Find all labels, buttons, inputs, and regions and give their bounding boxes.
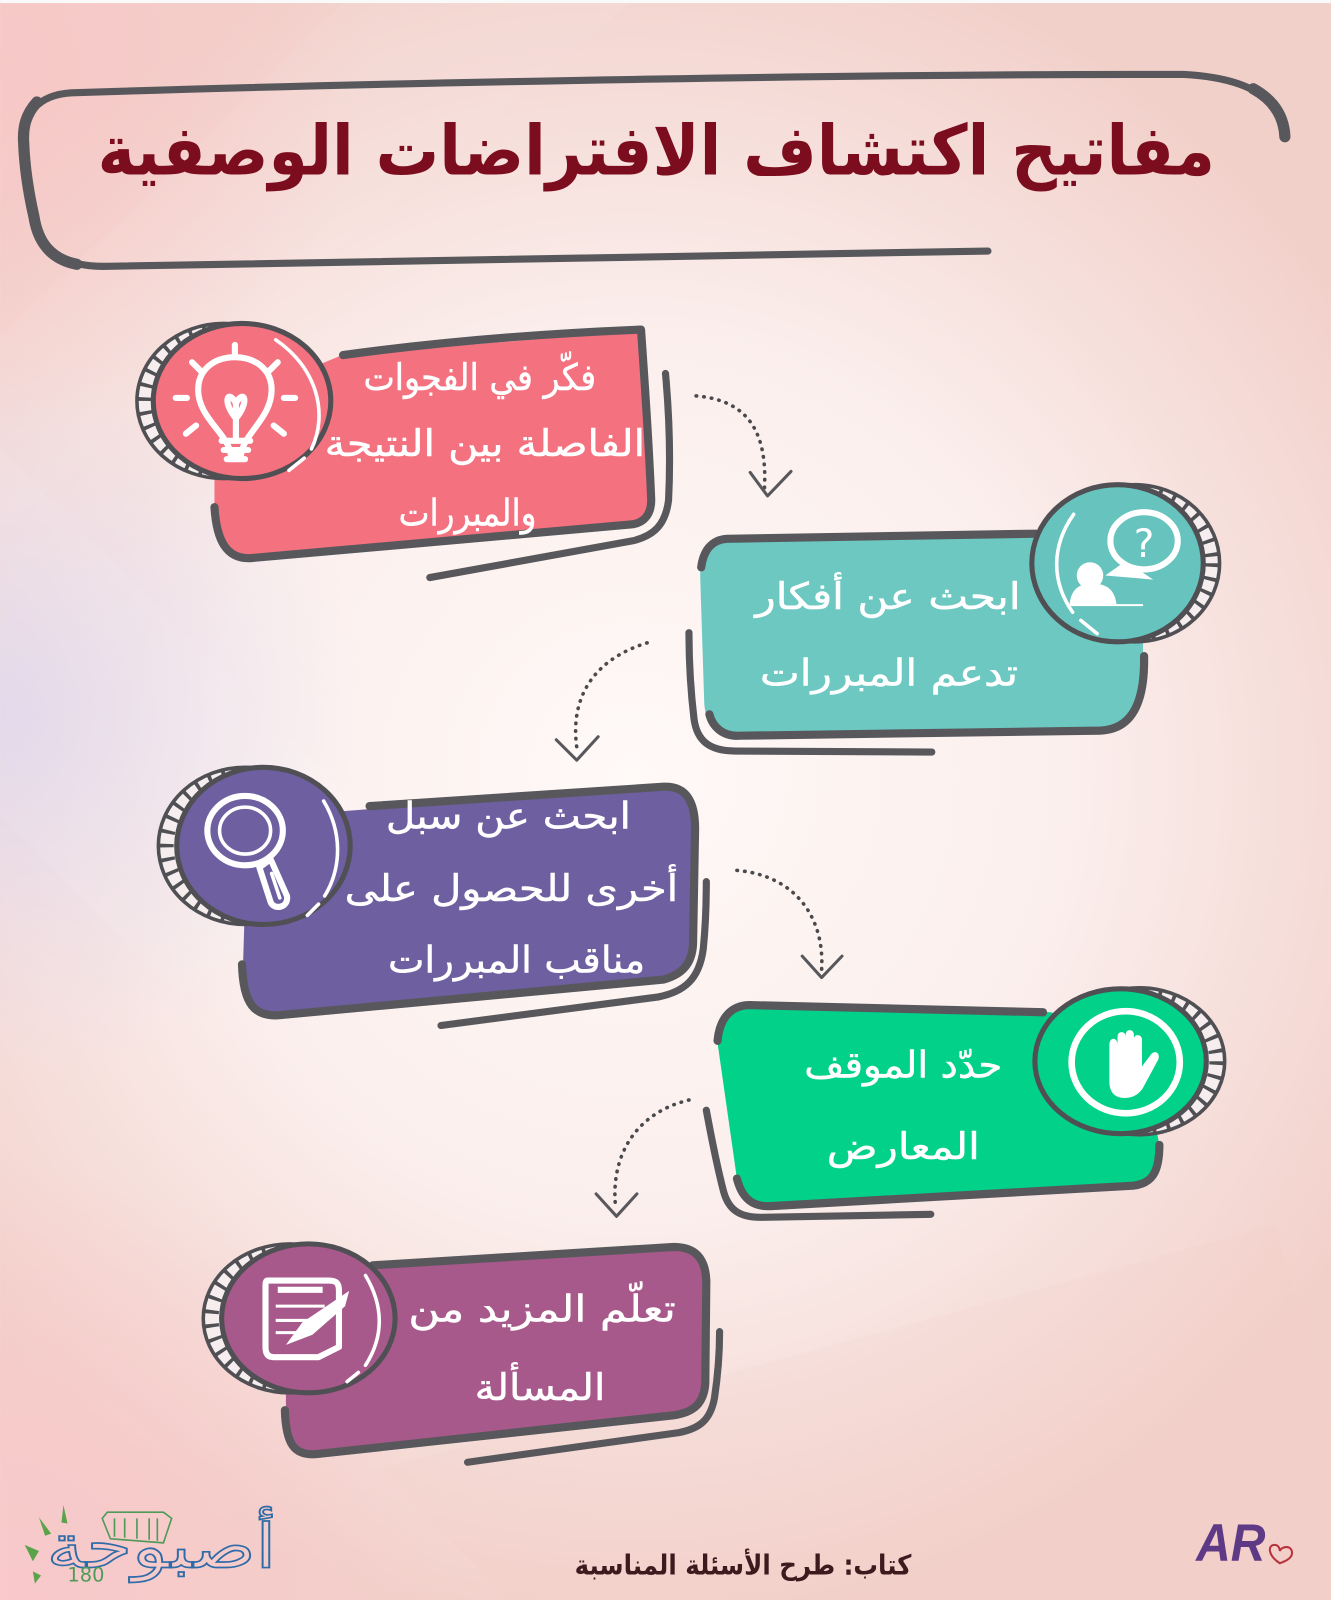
card 3 text	[345, 795, 678, 981]
card 1 text: والمبررات	[399, 492, 536, 535]
card 5 badge highlight	[347, 1276, 379, 1382]
card 2 outer line	[689, 633, 932, 752]
arrow 2	[556, 643, 647, 760]
card 3 text: مناقب المبررات	[388, 938, 645, 981]
card 1 outline	[214, 330, 651, 558]
icon: magnifying glass	[207, 796, 287, 907]
card 5 text	[408, 1281, 676, 1409]
card 4 body	[718, 1005, 1159, 1206]
card 1 badge	[153, 323, 331, 479]
card 4 badge	[1035, 989, 1206, 1134]
card 3 outline	[242, 787, 695, 1015]
card 2 body	[700, 533, 1143, 736]
card 5 text: تعلّم المزيد من	[408, 1281, 676, 1330]
logo wordmark: أصبوحة	[47, 1506, 276, 1582]
card 1 body	[214, 331, 653, 558]
icon: light bulb	[176, 345, 295, 459]
card 1 badge highlight	[276, 340, 319, 470]
logo leaves	[25, 1505, 68, 1584]
logo: AR heart: AR	[1194, 1514, 1266, 1573]
card 2: ideas	[689, 485, 1220, 752]
logo number: 180	[67, 1564, 104, 1587]
card 1 text	[325, 352, 645, 535]
card 3 body	[243, 787, 696, 1016]
card 3 text: أخرى للحصول على	[345, 864, 678, 910]
card 4 badge back	[1053, 988, 1225, 1135]
card 3 outer line	[441, 882, 706, 1026]
logo: Osbouha 180	[25, 1505, 276, 1587]
card 1 text: الفاصلة بين النتيجة	[325, 422, 645, 465]
arrow 4	[596, 1100, 689, 1216]
card 2 outline	[701, 534, 1144, 736]
card 3 badge	[177, 767, 350, 924]
card 2 text: تدعم المبررات	[760, 652, 1018, 695]
icon: note and pen	[266, 1281, 349, 1357]
card 5: learn more	[203, 1244, 720, 1462]
card 3: other ways	[158, 767, 706, 1026]
card 4 text: المعارض	[827, 1125, 980, 1168]
card 1 badge back	[137, 323, 310, 479]
card 5 badge back	[203, 1244, 377, 1393]
card 2 text	[753, 572, 1021, 695]
card 5 outline	[285, 1247, 706, 1454]
card 1: gaps	[137, 323, 670, 578]
icon: person with question bubble	[1070, 512, 1178, 606]
card 2 badge back	[1050, 485, 1220, 642]
card 4 text: حدّد الموقف	[804, 1044, 1002, 1087]
card 2 badge	[1032, 485, 1203, 642]
card 4 outer line	[706, 1110, 931, 1217]
card 4 outline	[718, 1005, 1159, 1206]
card 5 text: المسألة	[475, 1362, 605, 1409]
credit text: كتاب: طرح الأسئلة المناسبة	[575, 1547, 912, 1581]
card 1 text: فكّر في الفجوات	[363, 352, 596, 399]
arrow 1	[696, 396, 791, 496]
icon: person with question bubble: ?	[1134, 522, 1154, 567]
logo book	[102, 1512, 172, 1543]
arrow 3	[737, 870, 842, 978]
card 1 outer line	[430, 373, 670, 578]
card 2 badge highlight	[1057, 514, 1097, 634]
card 2 text: ابحث عن أفكار	[753, 572, 1021, 618]
card 5 badge	[222, 1244, 395, 1393]
card 3 text: ابحث عن سبل	[386, 795, 631, 838]
card 5 outer line	[468, 1332, 720, 1462]
icon: stop hand	[1072, 1011, 1180, 1113]
title: مفاتيح اكتشاف الافتراضات الوصفية	[98, 111, 1215, 191]
title frame	[23, 74, 1285, 266]
card 3 badge back	[158, 767, 332, 924]
card 4 text	[804, 1044, 1002, 1168]
card 5 body	[286, 1247, 706, 1454]
card 3 badge highlight	[307, 801, 338, 915]
card 4: opposing stance	[706, 988, 1225, 1217]
